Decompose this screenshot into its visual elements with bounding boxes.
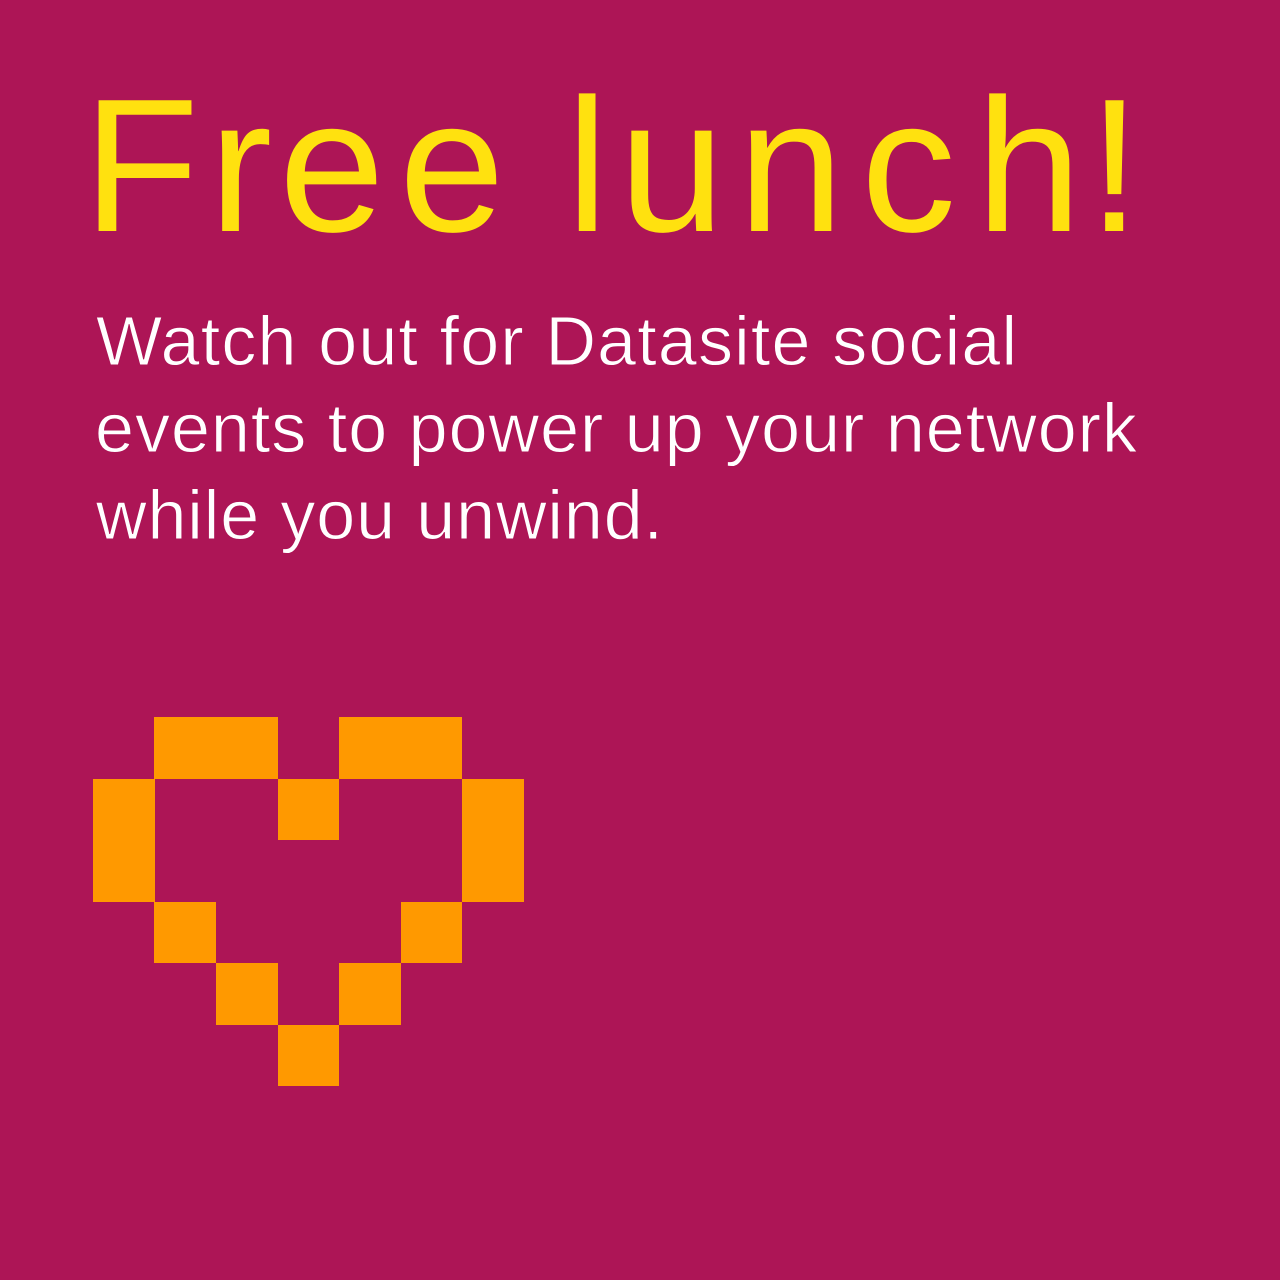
body text: events to power up your network	[95, 389, 1138, 467]
body text	[95, 302, 1138, 554]
icon: pixel heart	[93, 717, 524, 1086]
body text: Watch out for Datasite social	[96, 302, 1017, 380]
body text: while you unwind.	[95, 476, 663, 554]
title: Free lunch!: Free lunch!	[83, 60, 1141, 272]
